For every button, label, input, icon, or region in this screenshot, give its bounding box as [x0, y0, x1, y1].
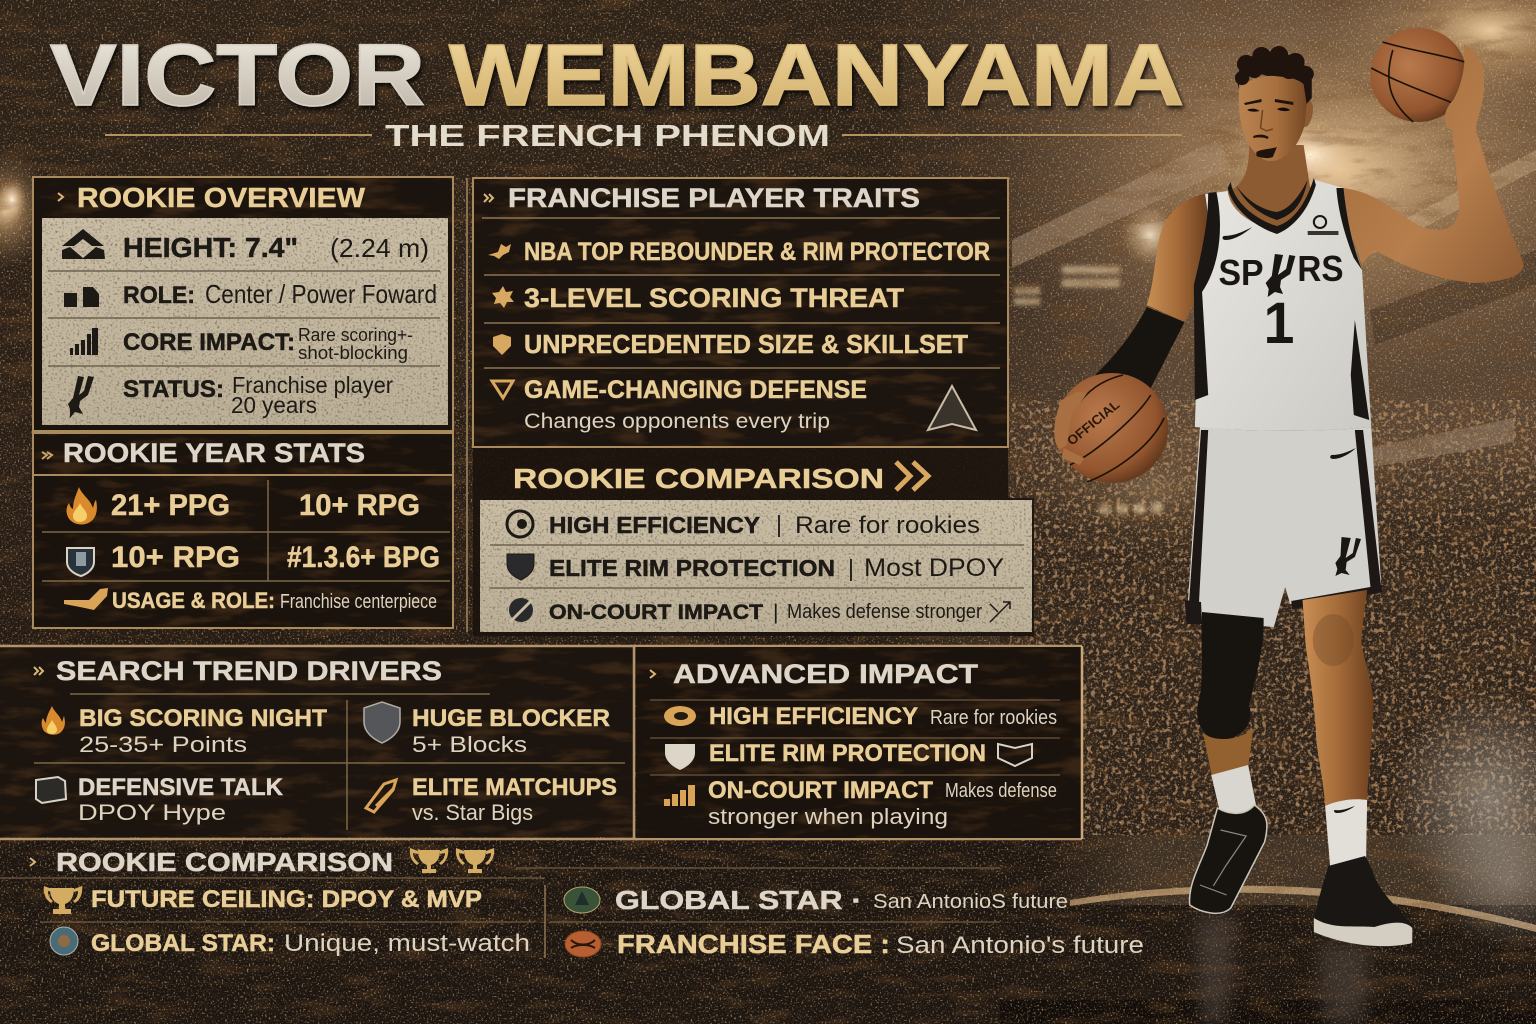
core impact row: CORE IMPACT:: [123, 329, 295, 356]
row: elite rim protection: |: [848, 555, 854, 581]
item: future ceiling: FUTURE CEILING: DPOY & MVP: [91, 886, 482, 913]
icon: rim shield: [507, 554, 534, 580]
left shin: [1203, 728, 1253, 778]
icon: rising bars: [664, 785, 695, 806]
row: high efficiency: HIGH EFFICIENCY: [549, 512, 760, 538]
heading: rookie year stats: ROOKIE YEAR STATS: [63, 438, 365, 468]
driver: defensive talk: DPOY Hype: [78, 800, 226, 825]
item: franchise face: [617, 929, 1144, 959]
core impact row: [123, 325, 413, 363]
driver: big scoring night: 25-35+ Points: [79, 732, 247, 757]
left arm: [1147, 193, 1208, 322]
row: high efficiency: Rare for rookies: [795, 512, 980, 539]
row: on-court impact: |: [773, 601, 778, 624]
shorts: [1185, 427, 1383, 627]
trait 4: [524, 376, 867, 433]
arena floor: [0, 835, 1536, 1024]
icon: usage: [64, 588, 108, 610]
panel: rookie comparison (middle): [473, 448, 1034, 636]
stat: blocks: #1.3.6+ BPG: [287, 541, 440, 574]
driver: defensive talk: [78, 774, 284, 825]
nike sock swoosh: [1334, 806, 1355, 813]
driver: huge blocker: [412, 705, 610, 757]
head: [1235, 46, 1314, 161]
panel: rookie comparison (bottom): [0, 847, 1144, 959]
status row: [123, 372, 393, 418]
role row: Center / Power Foward: [205, 279, 437, 309]
stat: 10+ RPG lower: 10+ RPG: [111, 541, 240, 574]
trait 4: GAME-CHANGING DEFENSE: [524, 376, 867, 404]
panel: advanced impact: [636, 646, 1082, 839]
row: on-court impact: ON-COURT IMPACT: [549, 601, 763, 624]
panel: franchise player traits: [473, 178, 1008, 447]
subtitle: THE FRENCH PHENOM: [385, 118, 830, 153]
driver: elite matchups: vs. Star Bigs: [412, 800, 533, 825]
trait 3: UNPRECEDENTED SIZE & SKILLSET: [524, 329, 968, 359]
chevron: [58, 193, 63, 201]
left sock: [1211, 765, 1256, 814]
driver: big scoring night: BIG SCORING NIGHT: [79, 705, 327, 732]
icon: rim shield: [665, 744, 695, 770]
player figure: [1054, 28, 1524, 1024]
driver: elite matchups: ELITE MATCHUPS: [412, 774, 617, 801]
lower ball in hand: [1054, 373, 1168, 483]
icon: height: [62, 229, 105, 259]
neck: [1228, 145, 1315, 232]
height row: HEIGHT: 7.4": [123, 232, 298, 263]
item: global star right: San AntonioS future: [873, 891, 1068, 913]
driver: huge blocker: HUGE BLOCKER: [412, 705, 610, 732]
hair: [1235, 46, 1314, 104]
row: high efficiency: [709, 703, 1057, 730]
right sock: [1325, 799, 1367, 868]
icon: flame: [42, 706, 65, 735]
shorts logo: [1335, 537, 1361, 576]
heading: rookie comparison: ROOKIE COMPARISON: [513, 463, 884, 494]
status row: 20 years: [231, 392, 317, 418]
left shoe: [1190, 805, 1267, 913]
item: global star right: GLOBAL STAR ·: [615, 885, 862, 915]
item: global star: Unique, must-watch: [284, 930, 530, 957]
upper ball: [1370, 28, 1467, 122]
jersey: [1194, 178, 1371, 431]
row: on-court impact: Makes defense stronger: [787, 601, 982, 623]
core impact row: Rare scoring+-: [298, 325, 413, 345]
jersey wordmark: SP: [1218, 252, 1264, 293]
floor reflection: [1195, 915, 1369, 1024]
right knee shade: [1313, 614, 1354, 666]
icon: blocker shield: [364, 702, 400, 743]
stat: 10+ RPG: 10+ RPG: [299, 489, 420, 522]
icon: global star emblem: [564, 887, 600, 913]
row: high efficiency: |: [776, 511, 782, 537]
row: elite rim protection: [549, 554, 1004, 582]
item: global star: [91, 930, 530, 957]
icon: scoring: [492, 286, 514, 308]
paper panel: [42, 218, 448, 425]
usage and role: [112, 588, 437, 613]
driver: defensive talk: DEFENSIVE TALK: [78, 774, 284, 801]
arena lights: [1014, 266, 1163, 515]
driver: elite matchups: [412, 774, 617, 825]
icon: eye: [507, 511, 533, 537]
title: WEMBANYAMA: [449, 27, 1184, 124]
jersey wordmark: RS: [1297, 248, 1344, 289]
right shoe sole: [1314, 918, 1412, 946]
trait 1: NBA TOP REBOUNDER & RIM PROTECTOR: [524, 238, 990, 266]
stat: 21+ PPG: 21+ PPG: [111, 489, 230, 522]
right leg: [1303, 590, 1373, 806]
heading: traits: FRANCHISE PLAYER TRAITS: [508, 183, 920, 213]
panel: search trend drivers: [0, 646, 1082, 839]
core impact row: shot-blocking: [298, 343, 408, 363]
raised arm: [1344, 44, 1524, 283]
row: elite rim protection: Most DPOY: [864, 554, 1004, 582]
usage and role: Franchise centerpiece: [280, 591, 437, 613]
height row: [123, 232, 429, 263]
heading: rookie overview: ROOKIE OVERVIEW: [77, 182, 366, 213]
icon: rebound: [488, 244, 511, 259]
panel: rookie year stats: [33, 433, 453, 628]
icon: defensive talk: [36, 777, 66, 803]
icon: emblem: [998, 744, 1032, 766]
icon: role: [64, 287, 99, 307]
role row: [123, 279, 437, 309]
title: VICTOR: [50, 27, 425, 124]
compression sleeve: [1087, 307, 1185, 388]
heading: rookie comparison: ROOKIE COMPARISON: [56, 847, 393, 877]
panel: rookie overview: [33, 177, 467, 632]
nike swoosh: [1223, 227, 1252, 240]
icon: matchups: [366, 780, 396, 812]
icon: trophy: [44, 886, 82, 914]
item: franchise face: FRANCHISE FACE :: [617, 929, 890, 959]
role row: ROLE:: [123, 282, 195, 309]
driver: big scoring night: [79, 705, 327, 757]
icon: trophies: [410, 848, 494, 873]
icon: bars: [70, 328, 98, 355]
row: high efficiency: [549, 511, 980, 539]
icon: spur: [68, 376, 94, 418]
row: high efficiency: HIGH EFFICIENCY: [709, 703, 918, 730]
left leg sleeve: [1197, 612, 1264, 743]
icon: flame: [66, 487, 97, 524]
status row: STATUS:: [123, 376, 224, 403]
heading: search trend drivers: SEARCH TREND DRIVERS: [56, 656, 442, 686]
jersey wordmark: [1218, 248, 1344, 297]
height row: (2.24 m): [330, 233, 429, 263]
icon: impact: [509, 598, 533, 622]
driver: huge blocker: 5+ Blocks: [412, 732, 527, 757]
jersey number: 1: [1264, 292, 1294, 356]
row: elite rim protection: ELITE RIM PROTECTION: [709, 740, 986, 767]
item: global star: GLOBAL STAR:: [91, 930, 275, 957]
shorts swoosh: [1330, 448, 1356, 459]
status row: Franchise player: [232, 372, 393, 398]
row: elite rim protection: ELITE RIM PROTECTION: [549, 555, 835, 581]
jersey patch: [1308, 216, 1338, 235]
trait 4: Changes opponents every trip: [524, 410, 830, 433]
icon: arrow: [990, 602, 1010, 622]
row: on-court impact: [708, 777, 1057, 829]
row: on-court impact: [549, 601, 982, 624]
icon: defense triangle: [492, 381, 513, 398]
title: [50, 27, 1184, 124]
row: on-court impact: stronger when playing: [708, 804, 948, 829]
row: on-court impact: Makes defense: [945, 780, 1057, 802]
paper panel: [480, 500, 1032, 632]
item: global star right: [615, 885, 1068, 915]
icon: globe: [50, 927, 78, 955]
row: on-court impact: ON-COURT IMPACT: [708, 777, 933, 804]
heading: advanced impact: ADVANCED IMPACT: [673, 659, 979, 689]
icon: defense emblem: [928, 386, 976, 430]
usage and role: USAGE & ROLE:: [112, 588, 275, 613]
icon: franchise emblem: [565, 931, 601, 957]
icon: double chevron: [896, 462, 928, 490]
right shoe: [1314, 856, 1412, 946]
icon: size shield: [493, 334, 511, 355]
row: high efficiency: Rare for rookies: [930, 707, 1057, 729]
item: franchise face: San Antonio's future: [896, 932, 1144, 959]
lower ball in hand: OFFICIAL: [1064, 397, 1122, 448]
trait 2: 3-LEVEL SCORING THREAT: [524, 283, 905, 313]
icon: shield: [67, 548, 94, 576]
icon: efficiency: [664, 706, 696, 726]
